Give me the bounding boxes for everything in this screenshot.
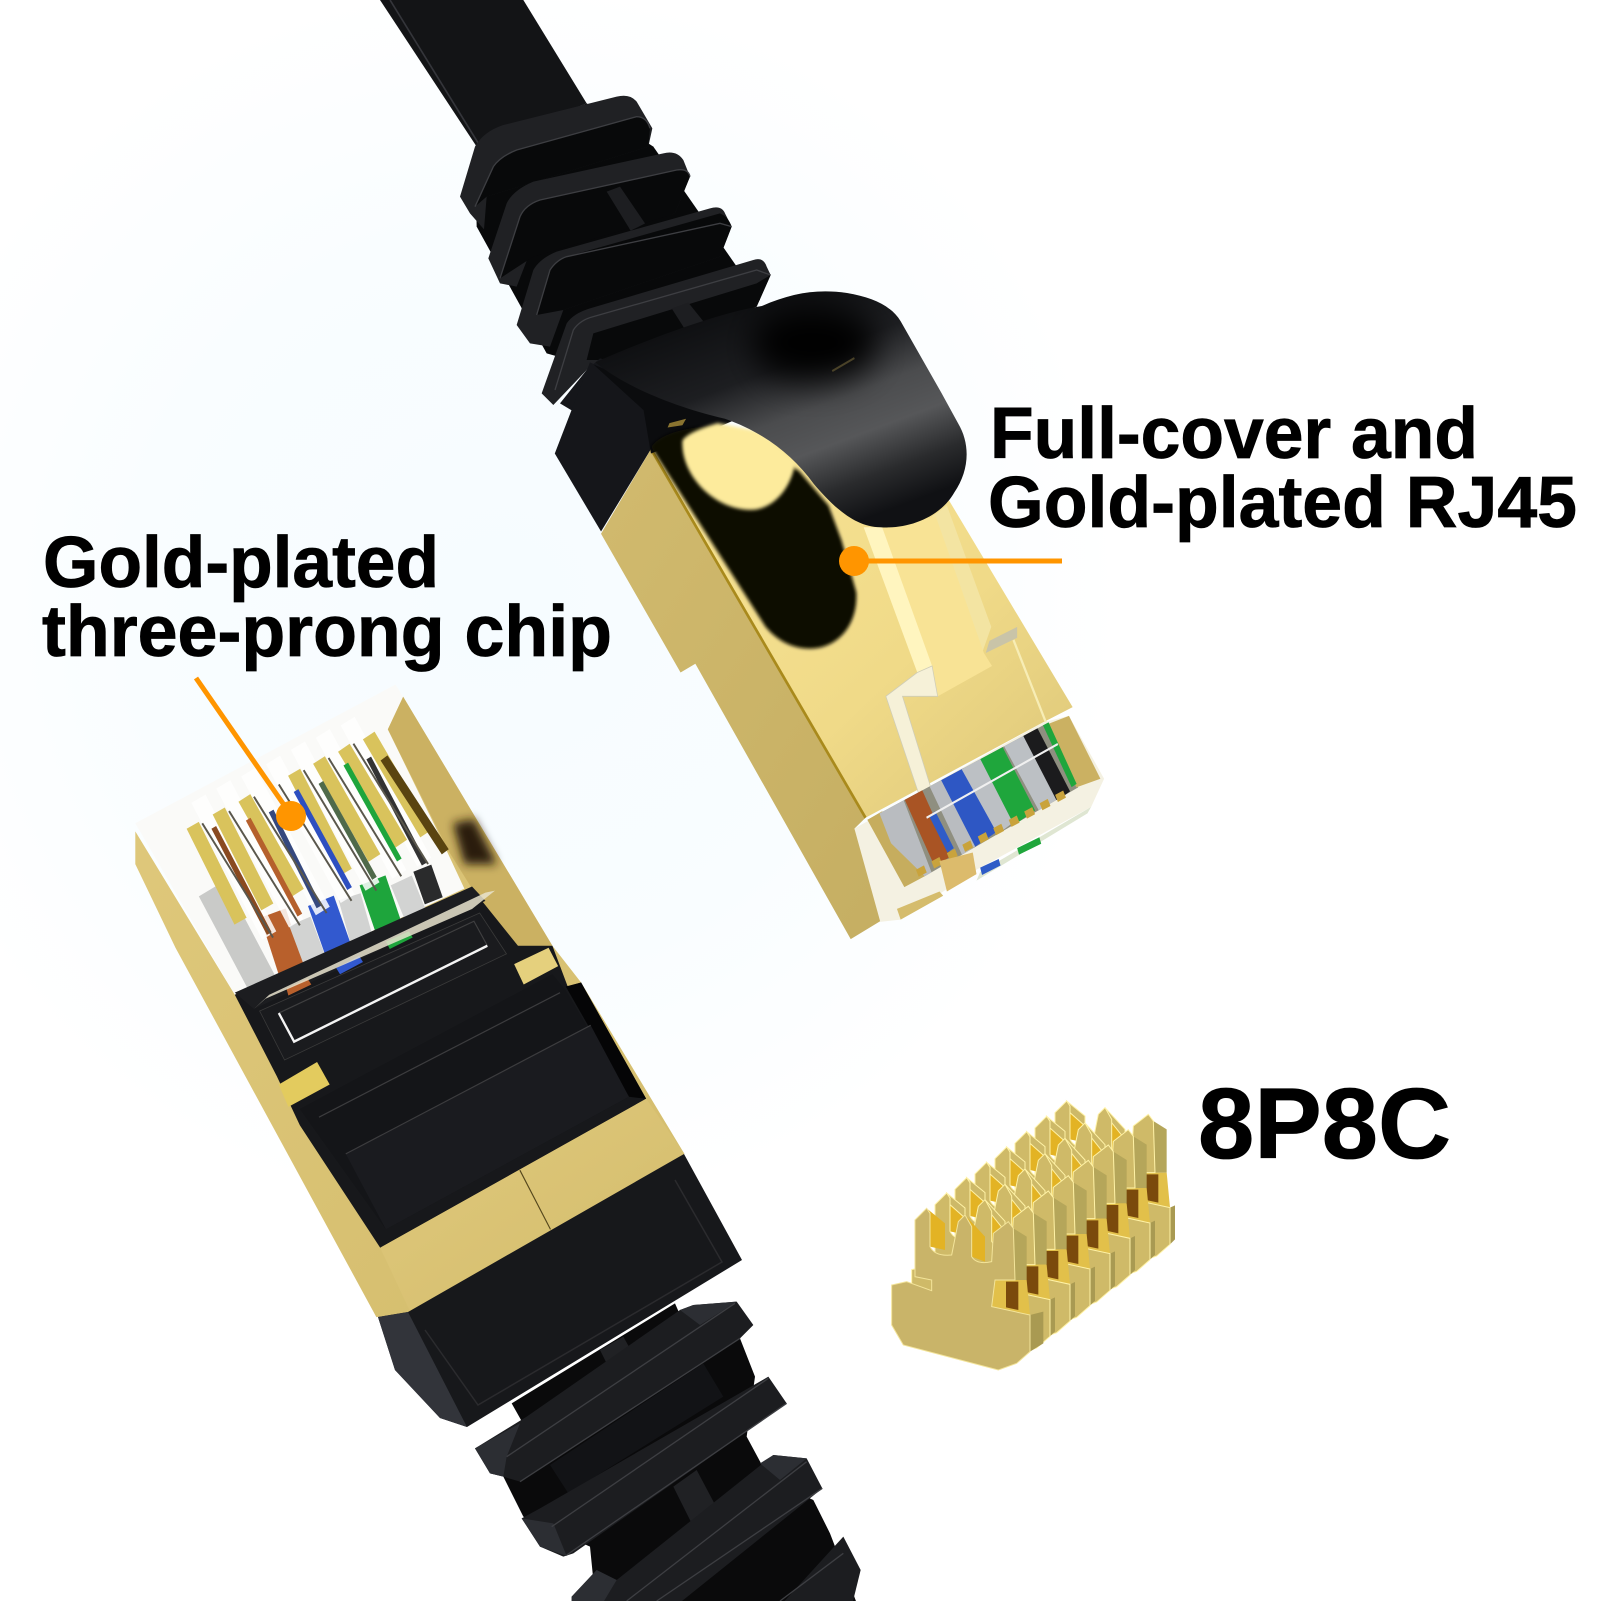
top cable and strain relief	[380, 0, 771, 413]
front housing and wires	[854, 709, 1104, 922]
gold clips	[514, 948, 558, 984]
gold side face	[601, 449, 901, 939]
gold body	[135, 697, 684, 1317]
front plate	[892, 1208, 1043, 1370]
label: full-cover RJ45	[988, 394, 1577, 543]
fin 1	[475, 1302, 753, 1482]
lower recess panels	[300, 974, 646, 1229]
coloured wires	[212, 868, 434, 982]
label: three-prong chip: Gold-plated	[43, 523, 439, 603]
black reflection on gold	[651, 425, 856, 649]
label: 8P8C: 8P8C	[1198, 1068, 1451, 1180]
three-prong gold contacts and clear tubes	[193, 721, 445, 938]
black bar and wire reflections	[235, 887, 495, 1009]
8P8C gold contact	[892, 1101, 1175, 1370]
clear latch tab	[864, 506, 1047, 800]
light reflection on gold	[682, 423, 795, 510]
label: full-cover RJ45: Gold-plated RJ45	[988, 463, 1577, 543]
black hood	[595, 291, 967, 527]
bottom strain relief and cable	[475, 1302, 861, 1601]
bottom boot block	[378, 1154, 742, 1427]
callout line: RJ45	[839, 546, 1062, 576]
label: three-prong chip: three-prong chip	[42, 592, 612, 672]
label: full-cover RJ45: Full-cover and	[990, 394, 1478, 474]
inner gold wall	[388, 697, 552, 946]
black recess	[235, 889, 646, 1248]
black rear block	[555, 362, 658, 532]
window panel	[260, 913, 506, 1060]
gold front band with seam	[380, 1099, 684, 1313]
fin 2	[522, 1377, 787, 1557]
callout line: three-prong chip	[196, 678, 306, 831]
top RJ45 connector	[555, 291, 1104, 939]
clear front housing	[135, 684, 472, 995]
flat cable	[380, 0, 587, 147]
label: three-prong chip	[42, 523, 612, 672]
fin 4	[773, 1537, 861, 1601]
contact plates, back to front	[1032, 1101, 1175, 1263]
bottom RJ45 connector	[135, 684, 684, 1317]
spine	[503, 1303, 861, 1601]
gold top face	[651, 419, 1073, 818]
fin 3	[572, 1455, 822, 1601]
shadow under hood	[594, 365, 732, 453]
